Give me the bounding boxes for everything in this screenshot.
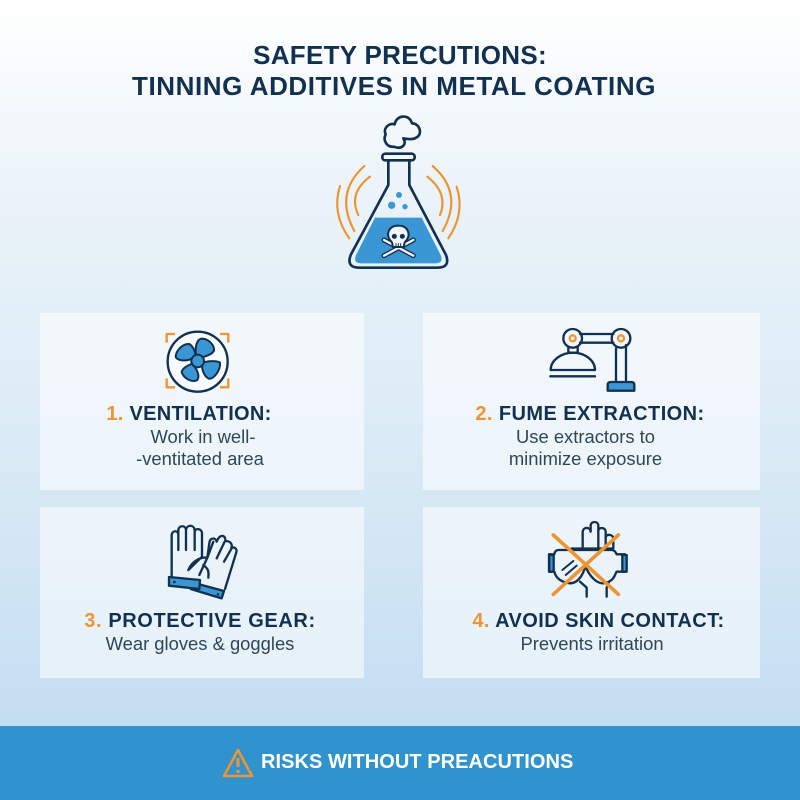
panel: avoid skin contact bbox=[423, 507, 760, 678]
step 1 text bbox=[136, 426, 264, 469]
step 2 heading: 2. FUME EXTRACTION: bbox=[475, 403, 705, 425]
step 4 heading: 4. AVOID SKIN CONTACT: bbox=[472, 610, 725, 632]
footer banner bbox=[0, 726, 800, 800]
panel: ventilation bbox=[40, 313, 364, 490]
icon: fume extractor arm bbox=[549, 328, 636, 392]
icon: toxic flask bbox=[336, 115, 461, 269]
title bbox=[132, 40, 656, 101]
step 4 text: Prevents irritation bbox=[520, 633, 664, 654]
icon: warning triangle bbox=[222, 748, 254, 778]
banner text: RISKS WITHOUT PREACUTIONS bbox=[261, 751, 573, 773]
step 1 heading: 1. VENTILATION: bbox=[106, 403, 272, 425]
step 2 text bbox=[509, 426, 662, 469]
step 2 text: minimize exposure bbox=[509, 448, 662, 469]
step 2 text: Use extractors to bbox=[516, 426, 655, 447]
panel: fume extraction bbox=[423, 313, 760, 490]
title: TINNING ADDITIVES IN METAL COATING bbox=[132, 71, 656, 101]
icon: gloves bbox=[168, 524, 238, 600]
icon: crossed goggles and hand bbox=[548, 520, 628, 598]
panel: protective gear bbox=[40, 507, 364, 678]
step 1 text: -ventitated area bbox=[136, 448, 264, 469]
icon: fan bbox=[166, 330, 230, 393]
step 3 text: Wear gloves & goggles bbox=[106, 633, 294, 654]
title: SAFETY PRECUTIONS: bbox=[253, 40, 547, 70]
step 3 heading: 3. PROTECTIVE GEAR: bbox=[84, 610, 316, 632]
step 1 text: Work in well- bbox=[151, 426, 255, 447]
